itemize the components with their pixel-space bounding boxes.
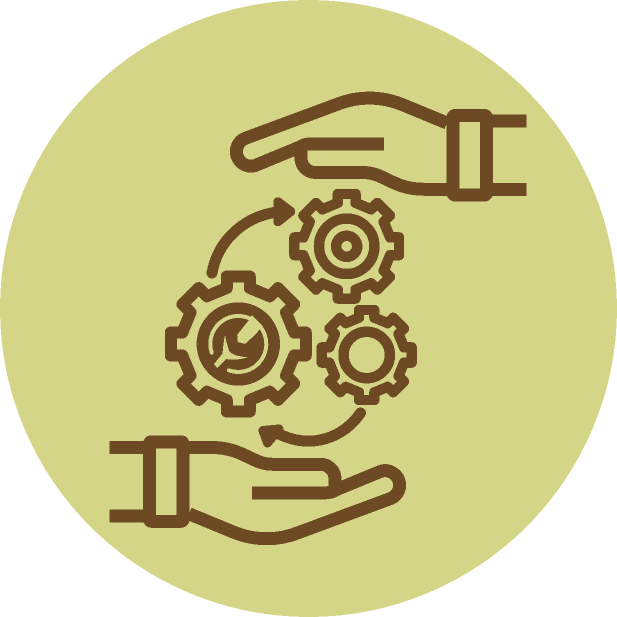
arrow: top curved arrow: [212, 202, 290, 273]
icon: lower right gear: [322, 310, 412, 400]
arrow: bottom curved arrow: [263, 413, 360, 443]
icon: bottom hand: [109, 442, 400, 539]
icon: upper right gear: [294, 194, 399, 299]
icon: top hand: [236, 98, 527, 195]
icon: large gear with wrench: [171, 276, 306, 412]
